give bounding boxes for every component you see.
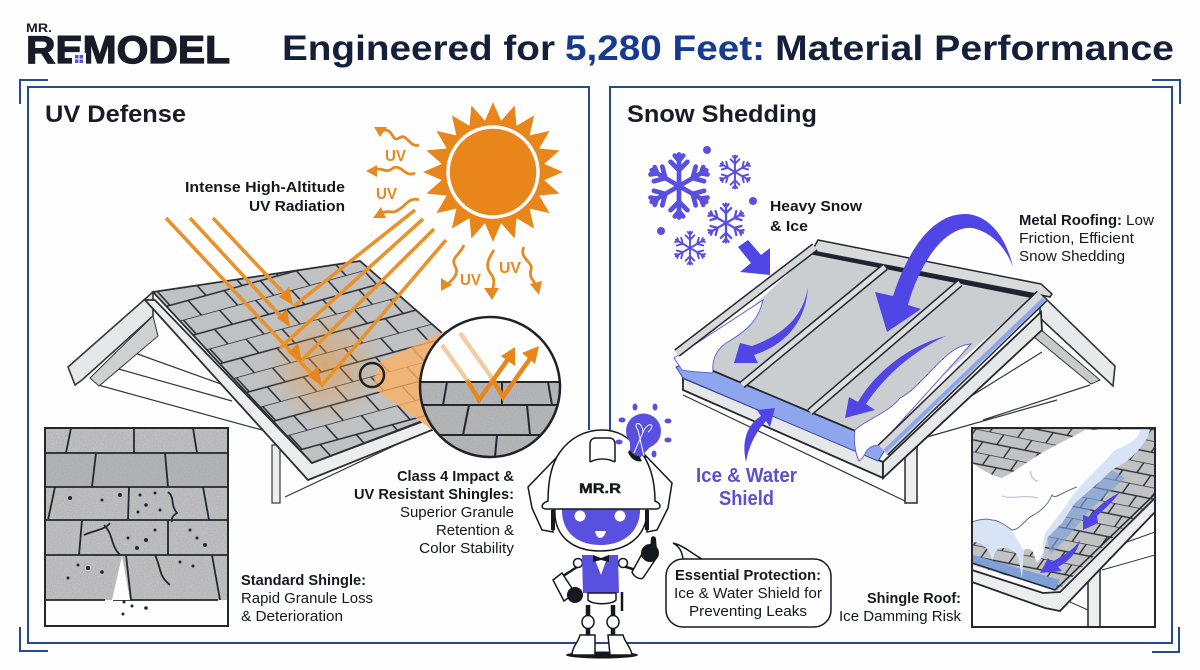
- label: metal roofing: Friction, Efficient: [1019, 230, 1135, 247]
- heading: Snow Shedding: Snow Shedding: [627, 101, 817, 128]
- arrow: large curved shedding arrow: [875, 214, 1013, 332]
- callout: essential protection: [666, 543, 831, 627]
- robot knees: [582, 616, 619, 628]
- snow on metal roof: [674, 300, 971, 461]
- label: ice and water shield: [696, 465, 797, 510]
- white snow layer: [972, 430, 1140, 562]
- earmuffs: [553, 510, 647, 530]
- light bulb idea icon: [616, 404, 672, 461]
- panel: snow shedding: [627, 101, 1155, 627]
- title: Material Performance: [775, 29, 1174, 68]
- label: intense high-altitude UV radiation: [185, 179, 345, 215]
- label: class 4 shingles: Retention &: [436, 522, 514, 539]
- robot face visor: [562, 508, 640, 545]
- UV labels: UV: [376, 186, 397, 203]
- label: metal roofing: Metal Roofing:: [1019, 212, 1122, 229]
- UV rays hitting and reflecting off the roof: [166, 210, 446, 386]
- label: shingle roof ice damming risk: [839, 590, 961, 625]
- magnified shingle circle: [420, 317, 560, 458]
- hard hat text: MR.R: [579, 481, 621, 496]
- robot eyes and smile: [574, 510, 626, 538]
- tool belt: [588, 593, 616, 604]
- UV labels: UV: [385, 148, 406, 165]
- panel: UV defense: [45, 101, 563, 626]
- logo: Mr. Remodel: MR.: [26, 21, 52, 35]
- label: class 4 shingles: UV Resistant Shingles:: [354, 486, 514, 503]
- house under metal roof: [683, 293, 1115, 503]
- UV labels: [376, 148, 521, 289]
- label: metal roofing: Low: [1126, 212, 1154, 229]
- small magnifier focus circle: [360, 363, 384, 387]
- hat crest: [590, 438, 615, 462]
- label: shingle roof ice damming risk: Shingle Roof:: [867, 590, 961, 607]
- label: standard shingle: Standard Shingle:: [241, 572, 366, 589]
- inset arrow: upper meltwater: [1083, 492, 1120, 530]
- arrow: pointing to ice and water shield: [744, 408, 775, 462]
- shingle roof: [145, 261, 490, 480]
- label: intense high-altitude UV radiation: UV Radiation: [249, 198, 345, 215]
- label: ice and water shield: Ice & Water: [696, 465, 797, 487]
- arrow: left snow sliding: [734, 287, 808, 363]
- UV labels: UV: [499, 260, 521, 277]
- arrow: heavy snow falling onto roof: [738, 240, 770, 275]
- label: class 4 shingles: Superior Granule: [400, 504, 514, 521]
- robot arms: [553, 552, 655, 601]
- label: standard shingle: & Deterioration: [241, 608, 343, 625]
- label: ice and water shield: Shield: [719, 488, 774, 510]
- robot legs: [588, 605, 613, 636]
- title: 5,280 Feet:: [565, 29, 765, 68]
- robot hard hat: [542, 430, 660, 509]
- robot vest: [582, 555, 619, 593]
- title: Engineered for: [282, 29, 555, 68]
- vest collar and bow tie: [593, 555, 609, 575]
- sun: [423, 102, 563, 242]
- label: heavy snow and ice: & Ice: [770, 218, 808, 235]
- label: metal roofing: Snow Shedding: [1019, 248, 1125, 265]
- UV labels: UV: [460, 272, 481, 289]
- house under shingle roof: [68, 292, 432, 503]
- robot boots: [572, 635, 632, 655]
- pale ice layer: [972, 430, 1150, 578]
- label: standard shingle: Rapid Granule Loss: [241, 590, 373, 607]
- callout: essential protection: Essential Protection:: [675, 567, 821, 584]
- inset arrow: lower meltwater: [1040, 540, 1080, 573]
- roof standing seams: [677, 247, 1044, 451]
- label: class 4 shingles: [354, 468, 515, 557]
- logo: Mr. Remodel: REMODEL: [26, 29, 230, 72]
- robot hands: [567, 536, 659, 603]
- callout: essential protection: Ice & Water Shield for: [674, 585, 822, 602]
- snowflakes: [648, 146, 757, 264]
- callout: essential protection: Preventing Leaks: [689, 603, 807, 620]
- belt tool: [621, 592, 623, 611]
- magnifier cone: [373, 330, 470, 433]
- label: intense high-altitude UV radiation: Intense High-Altitude: [185, 179, 345, 196]
- metal roof: [674, 240, 1052, 478]
- label: standard shingle: [241, 572, 373, 625]
- label: shingle roof ice damming risk: Ice Damming Risk: [839, 608, 961, 625]
- robot mascot MR.R: [528, 404, 672, 658]
- label: metal roofing: [1019, 212, 1154, 265]
- arrow: right snow sliding: [845, 336, 946, 418]
- label: class 4 shingles: Color Stability: [419, 540, 515, 557]
- label: heavy snow and ice: [770, 198, 862, 235]
- robot shadow: [566, 652, 638, 658]
- UV wavy arrows: [366, 127, 542, 300]
- inset: ice damming on shingle roof: [972, 428, 1155, 627]
- robot side flaps: [528, 455, 672, 532]
- robot head: [555, 508, 647, 551]
- title: [282, 29, 1174, 68]
- label: heavy snow and ice: Heavy Snow: [770, 198, 862, 215]
- inset: damaged standard shingle: [45, 428, 228, 626]
- heading: UV Defense: UV Defense: [45, 101, 186, 128]
- label: class 4 shingles: Class 4 Impact &: [397, 468, 514, 485]
